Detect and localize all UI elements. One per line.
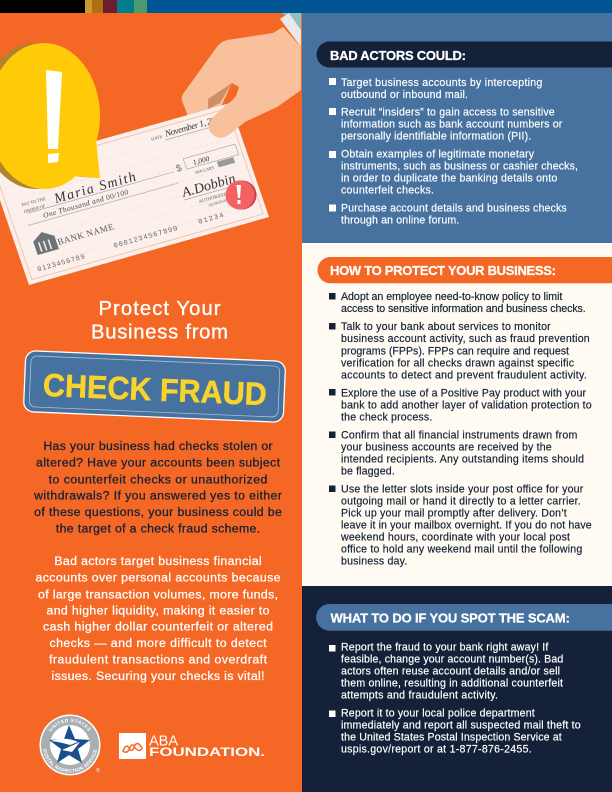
icon: hand back xyxy=(182,27,301,122)
icon: red alert dot xyxy=(226,180,256,210)
list: bad actors could xyxy=(329,77,578,226)
amount box xyxy=(174,144,240,175)
signature: SIGNATURE xyxy=(208,198,230,207)
heading: bad actors could: BAD ACTORS COULD: xyxy=(330,48,466,63)
list: how to protect your business: bank to add another layer of validation protection to xyxy=(341,399,592,411)
list: how to protect your business: Use the letter slots inside your post office for your xyxy=(341,483,584,495)
logo: postal inspection service seal: UNITED STATES xyxy=(48,718,91,732)
heading: bad actors could xyxy=(317,42,612,68)
heading: how to protect your business: HOW TO PROTECT YOUR BUSINESS: xyxy=(330,263,556,278)
signature: A.Dobbin xyxy=(179,172,238,201)
date field: November 1, 20 xyxy=(163,115,217,139)
intro paragraph: the target of a check fraud scheme. xyxy=(56,521,260,535)
list: how to protect your business: be flagged. xyxy=(341,465,395,477)
logo: ABA Foundation: ABA xyxy=(149,732,178,750)
intro paragraph: of these questions, your business could be xyxy=(34,505,282,519)
panel: bad actors could xyxy=(302,13,612,243)
illustration: hand holding check with alert bubble xyxy=(0,13,301,285)
list: what to do if you spot the scam xyxy=(329,642,581,756)
intro paragraph xyxy=(33,439,282,535)
payee: ORDER OF xyxy=(23,203,46,214)
list: how to protect your business: Talk to your bank about services to monitor xyxy=(341,321,551,333)
panel: orange left column xyxy=(0,0,302,792)
list: what to do if you spot the scam: actors often reuse account details and/or sell xyxy=(341,666,560,678)
list: what to do if you spot the scam: attempts and fraudulent activity. xyxy=(341,690,498,702)
list: how to protect your business: verification for all checks drawn against specific xyxy=(341,357,575,369)
amount in words: DOLLARS xyxy=(194,165,215,175)
badge: check fraud xyxy=(23,351,286,422)
intro paragraph: altered? Have your accounts been subject xyxy=(36,456,281,470)
logo: ABA Foundation: FOUNDATION. xyxy=(149,745,265,759)
payee: PAY TO THE xyxy=(21,196,47,207)
main title: Protect Your xyxy=(98,298,221,320)
heading: how to protect your business xyxy=(317,257,612,283)
bank name xyxy=(31,213,116,255)
logo: postal inspection service seal: ® xyxy=(96,767,100,774)
list: how to protect your business: access to sensitive information and business checks. xyxy=(341,303,586,315)
list: how to protect your business: weekend hours, coordinate with your local post xyxy=(340,531,570,543)
explanation paragraph xyxy=(36,554,281,683)
list: how to protect your business: outgoing mail or hand it directly to a letter carrier. xyxy=(341,495,581,507)
amount in words xyxy=(24,157,236,226)
list: how to protect your business: Confirm that all financial instruments drawn from xyxy=(341,429,577,441)
check numbers xyxy=(36,212,226,274)
panel: how to protect xyxy=(302,243,612,586)
signature: AUTHORIZED xyxy=(198,191,229,204)
top colour bar xyxy=(0,0,612,13)
main title: Business from xyxy=(91,322,228,344)
list: how to protect your business: the check process. xyxy=(341,411,432,423)
badge: check fraud: CHECK FRAUD xyxy=(42,367,268,412)
list: bad actors could: Recruit “insiders” to gain access to sensitive xyxy=(341,106,555,118)
amount box: $ xyxy=(175,163,184,175)
logo: ABA Foundation xyxy=(119,732,265,759)
list: bad actors could: through an online forum. xyxy=(341,214,459,226)
explanation paragraph: of large transaction volumes, more funds, xyxy=(38,587,278,601)
list: what to do if you spot the scam: Report the fraud to your bank right away! If xyxy=(341,642,548,654)
intro paragraph: Has your business had checks stolen or xyxy=(43,439,273,453)
explanation paragraph: fraudulent transactions and overdraft xyxy=(49,652,268,666)
list: how to protect your business: Pick up your mail promptly after delivery. Don’t xyxy=(341,507,567,519)
list: how to protect your business: business day. xyxy=(341,555,407,567)
logo: postal inspection service seal xyxy=(40,714,100,776)
bank name: BANK NAME xyxy=(56,221,115,247)
heading: what to do if you spot the scam xyxy=(316,604,612,631)
explanation paragraph: Bad actors target business financial xyxy=(54,554,262,568)
list: how to protect your business: leave it in your mailbox overnight. If you do not have xyxy=(341,519,592,531)
list: bad actors could: Obtain examples of legitimate monetary xyxy=(341,148,535,160)
check numbers: 0001234567890 xyxy=(113,225,179,251)
check numbers: 0123456789 xyxy=(36,253,86,274)
icon: yellow speech bubble with exclamation mark xyxy=(0,43,100,189)
date field xyxy=(149,111,231,144)
list: bad actors could: counterfeit checks. xyxy=(341,184,434,196)
intro paragraph: to counterfeit checks or unauthorized xyxy=(49,472,268,486)
list: how to protect your business: your business accounts are received by the xyxy=(341,441,552,453)
list: how to protect your business: programs (FPPs). FPPs can require and request xyxy=(341,345,569,357)
list: bad actors could: information such as bank account numbers or xyxy=(341,118,563,130)
check document xyxy=(0,103,269,285)
list: how to protect your business: business account activity, such as fraud prevention xyxy=(341,333,590,345)
payee: Maria Smith xyxy=(51,170,138,207)
logo: postal inspection service seal: POSTAL INSPECTION SERVICE xyxy=(43,749,97,772)
main title xyxy=(91,298,228,344)
amount in words: One Thousand and 00/100 xyxy=(42,187,130,220)
list: bad actors could: Target business accounts by intercepting xyxy=(341,77,542,89)
list: what to do if you spot the scam: them online, resulting in additional counterfeit xyxy=(341,678,563,690)
list: how to protect your business: Adopt an employee need-to-know policy to limit xyxy=(341,291,562,303)
list: bad actors could: in order to duplicate the banking details onto xyxy=(341,172,557,184)
signature xyxy=(179,169,252,213)
explanation paragraph: issues. Securing your checks is vital! xyxy=(52,669,264,683)
list: bad actors could: instruments, such as business or cashier checks, xyxy=(341,160,578,172)
explanation paragraph: accounts over personal accounts because xyxy=(36,571,281,585)
list: how to protect your business: accounts to detect and prevent fraudulent activity. xyxy=(341,369,587,381)
heading: what to do if you spot the scam: WHAT TO DO IF YOU SPOT THE SCAM: xyxy=(330,611,570,626)
icon: hand thumb xyxy=(209,90,301,138)
list: bad actors could: personally identifiable information (PII). xyxy=(341,130,531,142)
explanation paragraph: checks — and more difficult to detect xyxy=(50,636,267,650)
list: bad actors could: outbound or inbound mail. xyxy=(341,89,468,101)
check numbers: 01234 xyxy=(197,212,225,227)
list: what to do if you spot the scam: feasible, change your account number(s). Bad xyxy=(341,654,563,666)
date field: DATE xyxy=(150,134,163,142)
list: how to protect your business: Explore the use of a Positive Pay product with your xyxy=(341,387,586,399)
payee xyxy=(21,160,175,216)
panel: what to do xyxy=(302,586,612,792)
icon: shirt cuff xyxy=(280,13,301,47)
list: bad actors could: Purchase account details and business checks xyxy=(341,202,567,214)
intro paragraph: withdrawals? If you answered yes to either xyxy=(33,488,282,502)
explanation paragraph: and higher liquidity, making it easier to xyxy=(46,604,270,618)
explanation paragraph: cash higher dollar counterfeit or altered xyxy=(43,620,273,634)
amount box: 1,000 xyxy=(192,154,211,167)
list: what to do if you spot the scam: immediately and report all suspected mail theft to xyxy=(341,720,581,732)
icon: red tail sliver xyxy=(77,174,100,178)
list: how to protect your business: office to hold any weekend mail until the following xyxy=(341,543,582,555)
list: how to protect your business xyxy=(329,291,592,567)
list: how to protect your business: intended recipients. Any outstanding items should xyxy=(341,453,584,465)
list: what to do if you spot the scam: the United States Postal Inspection Service at xyxy=(341,732,562,744)
list: what to do if you spot the scam: uspis.gov/report or at 1-877-876-2455. xyxy=(341,744,532,756)
list: what to do if you spot the scam: Report it to your local police department xyxy=(341,708,535,720)
